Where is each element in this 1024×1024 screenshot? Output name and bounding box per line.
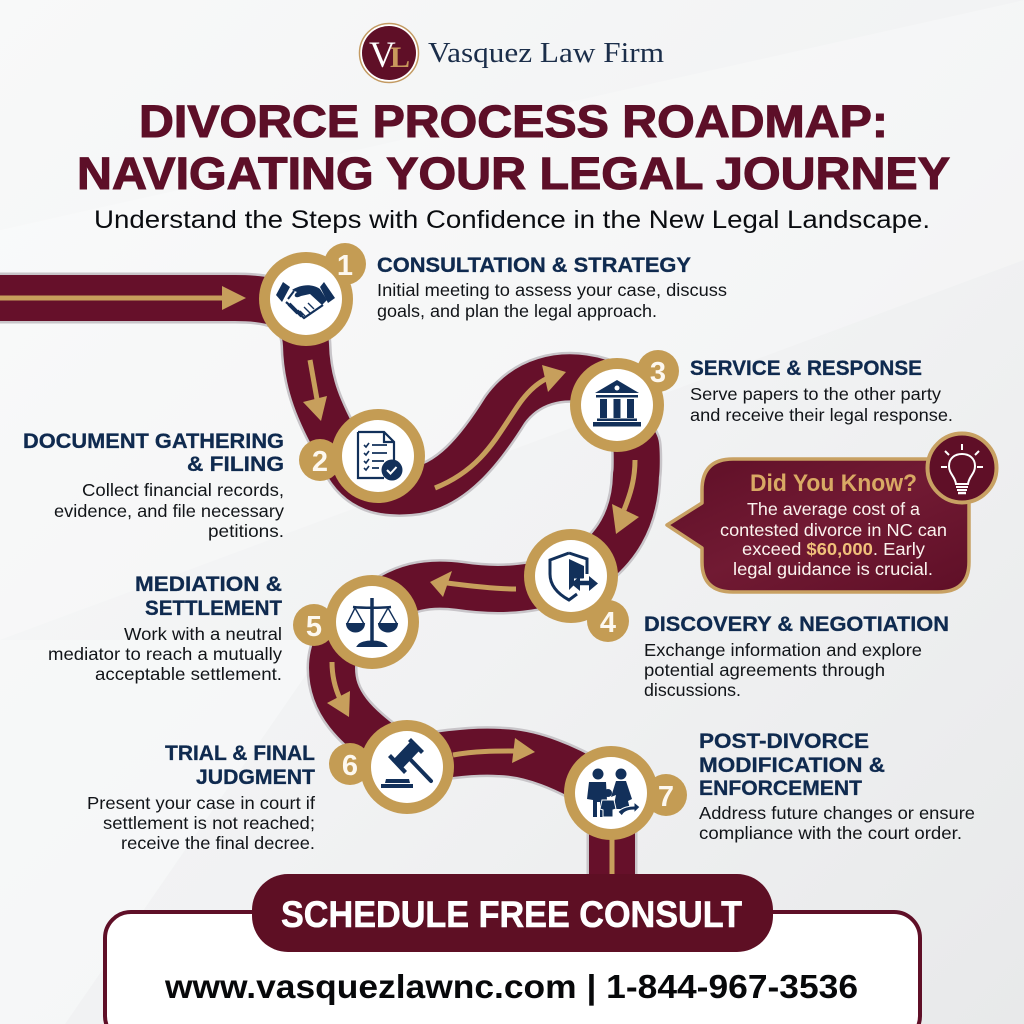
step 4 text	[644, 613, 949, 700]
arrow: step 2 to 3	[435, 365, 566, 488]
step 6 text: TRIAL & FINAL	[165, 742, 315, 765]
step 6 text	[87, 742, 315, 853]
step 2 text: petitions.	[208, 521, 284, 541]
step 4 node	[524, 529, 629, 642]
winding road	[0, 298, 637, 885]
step 1 text: goals, and plan the legal approach.	[377, 301, 657, 321]
step 4 text: potential agreements through	[644, 660, 885, 680]
callout: did you know	[667, 434, 996, 592]
icon: family with arrow	[587, 768, 640, 817]
step 7 node	[564, 746, 687, 840]
icon: gavel	[381, 738, 431, 788]
step 6 text: receive the final decree.	[121, 833, 315, 853]
arrow: step 4 to 5	[430, 571, 516, 597]
step 7 text: POST-DIVORCE	[699, 730, 869, 753]
icon: scales of justice	[347, 598, 397, 646]
icon: courthouse	[593, 380, 641, 426]
step 2 text: DOCUMENT GATHERING	[23, 430, 284, 453]
logo: Vasquez Law Firm	[360, 24, 664, 82]
logo: Vasquez Law Firm: V	[369, 35, 396, 76]
step 5 text	[48, 573, 282, 684]
arrow: step 3 to 4	[612, 460, 639, 534]
arrow: step 5 to 6	[327, 662, 350, 717]
step 1 text	[377, 254, 727, 321]
step 1 node	[259, 243, 366, 346]
step 2 node	[299, 409, 425, 503]
step 1 text: CONSULTATION & STRATEGY	[377, 254, 691, 277]
step 5 node: 5	[306, 611, 322, 643]
step 6 text: settlement is not reached;	[103, 813, 315, 833]
button: schedule free consult: SCHEDULE FREE CONSULT	[281, 894, 742, 935]
step 5 text: mediator to reach a mutually	[48, 644, 282, 664]
step 4 node: 4	[600, 607, 616, 639]
contact panel: www.vasquezlawnc.com | 1-844-967-3536	[164, 968, 858, 1005]
contact panel	[105, 912, 920, 1024]
step 3 text: Serve papers to the other party	[690, 384, 941, 404]
callout: did you know: legal guidance is crucial.	[733, 559, 933, 579]
button: schedule free consult	[252, 874, 773, 952]
step 3 node: 3	[650, 357, 666, 389]
step 2 text: & FILING	[187, 453, 284, 476]
title: NAVIGATING YOUR LEGAL JOURNEY	[77, 148, 950, 199]
step 3 text	[690, 357, 953, 425]
callout: did you know: The average cost of a	[747, 499, 920, 519]
step 7 node: 7	[658, 781, 674, 813]
step 2 text: Collect financial records,	[82, 480, 284, 500]
logo: Vasquez Law Firm: Vasquez Law Firm	[428, 37, 664, 69]
callout: did you know: contested divorce in NC can	[720, 520, 947, 540]
arrow: step 6 to 7	[453, 738, 535, 763]
step 7 text	[699, 730, 975, 843]
step 4 text: discussions.	[644, 680, 741, 700]
arrow: into step 1	[0, 286, 246, 310]
step 5 text: MEDIATION &	[135, 573, 282, 596]
logo: Vasquez Law Firm: L	[390, 41, 410, 74]
title	[77, 96, 950, 199]
step 6 text: Present your case in court if	[87, 793, 315, 813]
step 2 text	[23, 430, 284, 541]
step 7 text: compliance with the court order.	[699, 823, 962, 843]
step 5 text: acceptable settlement.	[95, 664, 282, 684]
step 7 text: MODIFICATION &	[699, 754, 885, 777]
step 4 text: DISCOVERY & NEGOTIATION	[644, 613, 949, 636]
step 6 node: 6	[342, 750, 358, 782]
step 4 text: Exchange information and explore	[644, 640, 922, 660]
step 7 text: Address future changes or ensure	[699, 803, 975, 823]
title: DIVORCE PROCESS ROADMAP:	[139, 96, 888, 147]
step 1 node: 1	[337, 250, 353, 282]
icon: shield with exchange arrows	[550, 553, 598, 600]
icon: light bulb	[928, 434, 996, 502]
step 5 node	[293, 575, 419, 669]
arrow: step 1 to 2	[303, 360, 327, 421]
subtitle: Understand the Steps with Confidence in the New Legal Landscape.	[94, 206, 930, 234]
icon: document checklist	[358, 432, 402, 480]
step 5 text: Work with a neutral	[124, 624, 282, 644]
step 3 node	[570, 350, 679, 452]
step 6 node	[329, 720, 454, 814]
step 2 node: 2	[312, 446, 328, 478]
step 5 text: SETTLEMENT	[145, 597, 282, 620]
icon: handshake	[276, 282, 335, 318]
step 2 text: evidence, and file necessary	[54, 501, 284, 521]
step 3 text: SERVICE & RESPONSE	[690, 357, 922, 380]
step 1 text: Initial meeting to assess your case, discuss	[377, 280, 727, 300]
road arrows	[0, 286, 639, 880]
arrow: step 7 down	[610, 835, 614, 880]
callout: did you know: Did You Know?	[750, 470, 917, 497]
callout: did you know: exceed $60,000. Early	[742, 539, 925, 559]
step 3 text: and receive their legal response.	[690, 405, 953, 425]
step 7 text: ENFORCEMENT	[699, 777, 862, 800]
step 6 text: JUDGMENT	[196, 766, 315, 789]
